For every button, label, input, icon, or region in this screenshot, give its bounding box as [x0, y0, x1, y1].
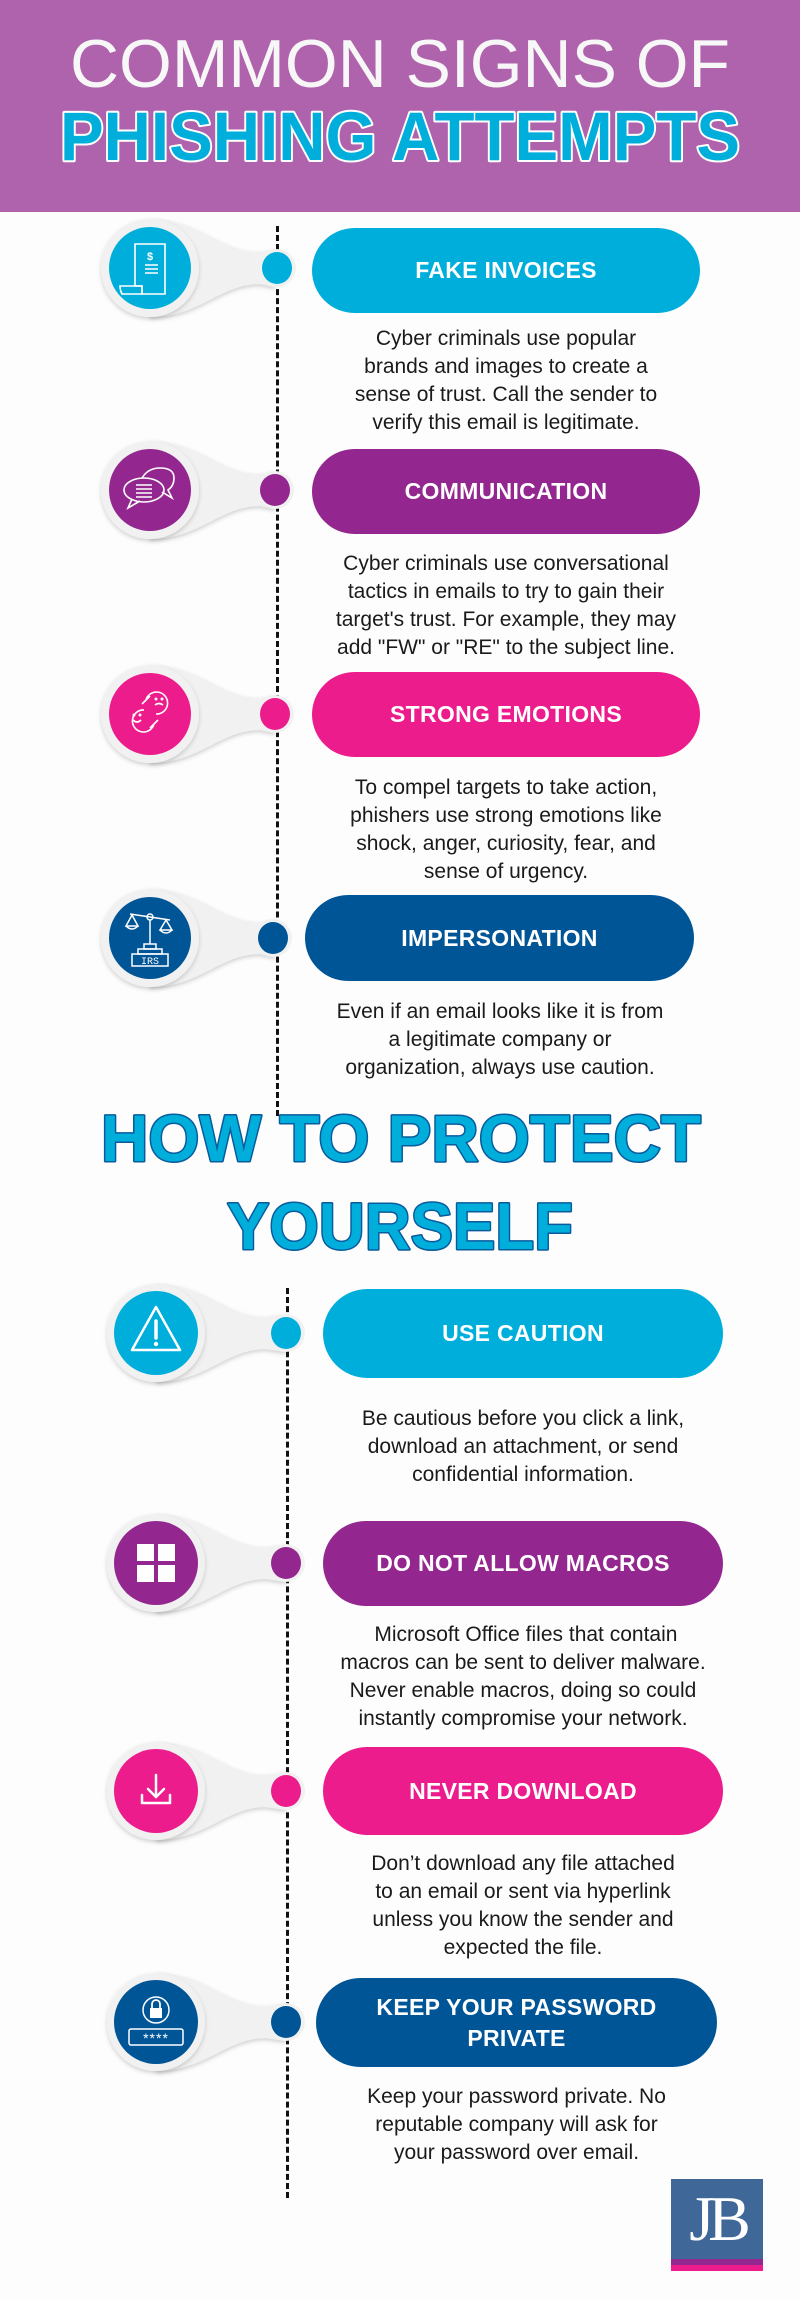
item: never download	[105, 1742, 723, 1959]
text: fake invoices: Cyber criminals use popular	[376, 327, 636, 350]
logo: JB	[671, 2179, 763, 2271]
text: communication: tactics in emails to try to gain their	[348, 580, 664, 603]
text: use caution: download an attachment, or send	[368, 1435, 678, 1458]
icon: download with connector	[105, 1742, 305, 1844]
dashed timeline bottom	[286, 1288, 289, 2198]
heading: how to protect yourself	[101, 1101, 702, 1260]
text: strong emotions: sense of urgency.	[424, 860, 588, 883]
pill: keep your password private: KEEP YOUR PASSWORD	[376, 1994, 657, 2020]
text: impersonation: a legitimate company or	[389, 1028, 611, 1051]
item: communication	[99, 440, 700, 659]
pill: communication	[312, 449, 700, 534]
pill: strong emotions	[312, 672, 700, 757]
text: keep your password private: Keep your password private. No	[367, 2085, 666, 2108]
pill: use caution: USE CAUTION	[442, 1320, 604, 1346]
text: do not allow macros	[340, 1623, 706, 1730]
item: impersonation	[99, 888, 694, 1079]
pill: strong emotions: STRONG EMOTIONS	[390, 701, 622, 727]
icon: lock password with connector	[105, 1972, 305, 2076]
text: never download: to an email or sent via hyperlink	[375, 1880, 671, 1903]
item: use caution	[105, 1284, 723, 1486]
title line 1: COMMON SIGNS OF	[70, 26, 730, 102]
item: do not allow macros	[105, 1514, 723, 1730]
text: keep your password private	[367, 2085, 666, 2164]
text: fake invoices: sense of trust. Call the sender to	[355, 383, 657, 406]
heading: how to protect yourself: HOW TO PROTECT	[101, 1101, 701, 1175]
pill: impersonation	[305, 895, 694, 981]
text: never download: unless you know the sender and	[372, 1908, 674, 1931]
text: do not allow macros: Microsoft Office files that contain	[374, 1623, 677, 1646]
text: strong emotions: phishers use strong emotions like	[350, 804, 662, 827]
pill: use caution	[323, 1289, 723, 1378]
icon: windows with connector	[105, 1514, 305, 1616]
icon: emotions with connector	[99, 664, 294, 768]
pill: communication: COMMUNICATION	[405, 478, 607, 504]
item: keep your password private	[105, 1972, 717, 2164]
text: use caution: Be cautious before you click a link,	[362, 1407, 684, 1430]
text: communication: add "FW" or "RE" to the subject line.	[337, 636, 675, 659]
item: strong emotions	[99, 664, 700, 883]
logo: JB: JB	[689, 2183, 745, 2254]
text: strong emotions	[350, 776, 662, 883]
text: use caution: confidential information.	[412, 1463, 634, 1486]
text: communication	[336, 552, 676, 659]
text: strong emotions: shock, anger, curiosity, fear, and	[356, 832, 656, 855]
pill: keep your password private: PRIVATE	[467, 2024, 566, 2050]
icon: scales IRS with connector	[99, 888, 292, 992]
pill: fake invoices: FAKE INVOICES	[415, 257, 597, 283]
text: do not allow macros: Never enable macros, doing so could	[350, 1679, 696, 1702]
text: keep your password private: reputable company will ask for	[375, 2113, 658, 2136]
text: fake invoices: brands and images to create a	[364, 355, 648, 378]
pill: keep your password private	[316, 1978, 717, 2067]
icon: lock password with connector: ****	[143, 2030, 169, 2046]
pill: do not allow macros: DO NOT ALLOW MACROS	[376, 1550, 670, 1576]
text: strong emotions: To compel targets to take action,	[355, 776, 657, 799]
text: fake invoices: verify this email is legitimate.	[372, 411, 640, 434]
icon: chat bubbles with connector	[99, 440, 294, 544]
text: communication: target's trust. For example, they may	[336, 608, 676, 631]
icon: warning with connector	[105, 1284, 305, 1386]
text: impersonation	[337, 1000, 663, 1079]
text: never download: expected the file.	[444, 1936, 602, 1959]
pill: do not allow macros	[323, 1521, 723, 1606]
text: do not allow macros: instantly compromise your network.	[358, 1707, 688, 1730]
icon: invoice with connector	[99, 218, 296, 322]
header banner	[0, 0, 800, 212]
text: never download: Don’t download any file attached	[371, 1852, 675, 1875]
text: impersonation: Even if an email looks like it is from	[337, 1000, 663, 1023]
icon: invoice with connector: $	[147, 251, 153, 263]
icon: scales IRS with connector: IRS	[141, 957, 159, 968]
text: communication: Cyber criminals use conversational	[343, 552, 669, 575]
item: fake invoices	[99, 218, 700, 434]
title line 2: PHISHING ATTEMPTS	[60, 98, 740, 175]
pill: never download: NEVER DOWNLOAD	[409, 1778, 637, 1804]
text: do not allow macros: macros can be sent to deliver malware.	[340, 1651, 706, 1674]
text: keep your password private: your password over email.	[394, 2141, 639, 2164]
dashed timeline top	[276, 226, 279, 1116]
text: never download	[371, 1852, 675, 1959]
text: fake invoices	[355, 327, 657, 434]
text: use caution	[362, 1407, 684, 1486]
text: impersonation: organization, always use caution.	[345, 1056, 655, 1079]
pill: fake invoices	[312, 228, 700, 313]
pill: never download	[323, 1747, 723, 1835]
pill: impersonation: IMPERSONATION	[401, 924, 598, 950]
